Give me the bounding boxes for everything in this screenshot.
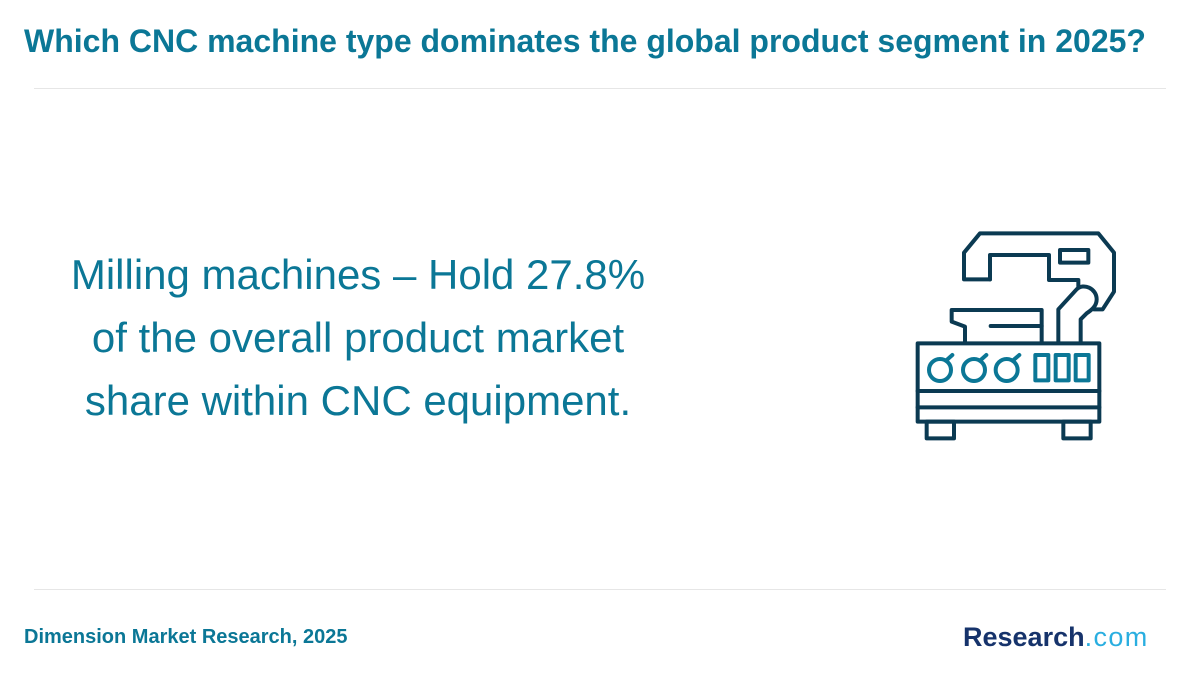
logo: Research.com	[963, 622, 1149, 652]
main statement	[71, 251, 645, 424]
main statement: Milling machines – Hold 27.8%	[71, 251, 645, 298]
main statement: share within CNC equipment.	[85, 377, 631, 424]
source note: Dimension Market Research, 2025	[24, 626, 348, 648]
icon: milling machine	[916, 231, 1116, 440]
main statement: of the overall product market	[92, 314, 624, 361]
title: Which CNC machine type dominates the global product segment in 2025?	[24, 23, 1146, 59]
